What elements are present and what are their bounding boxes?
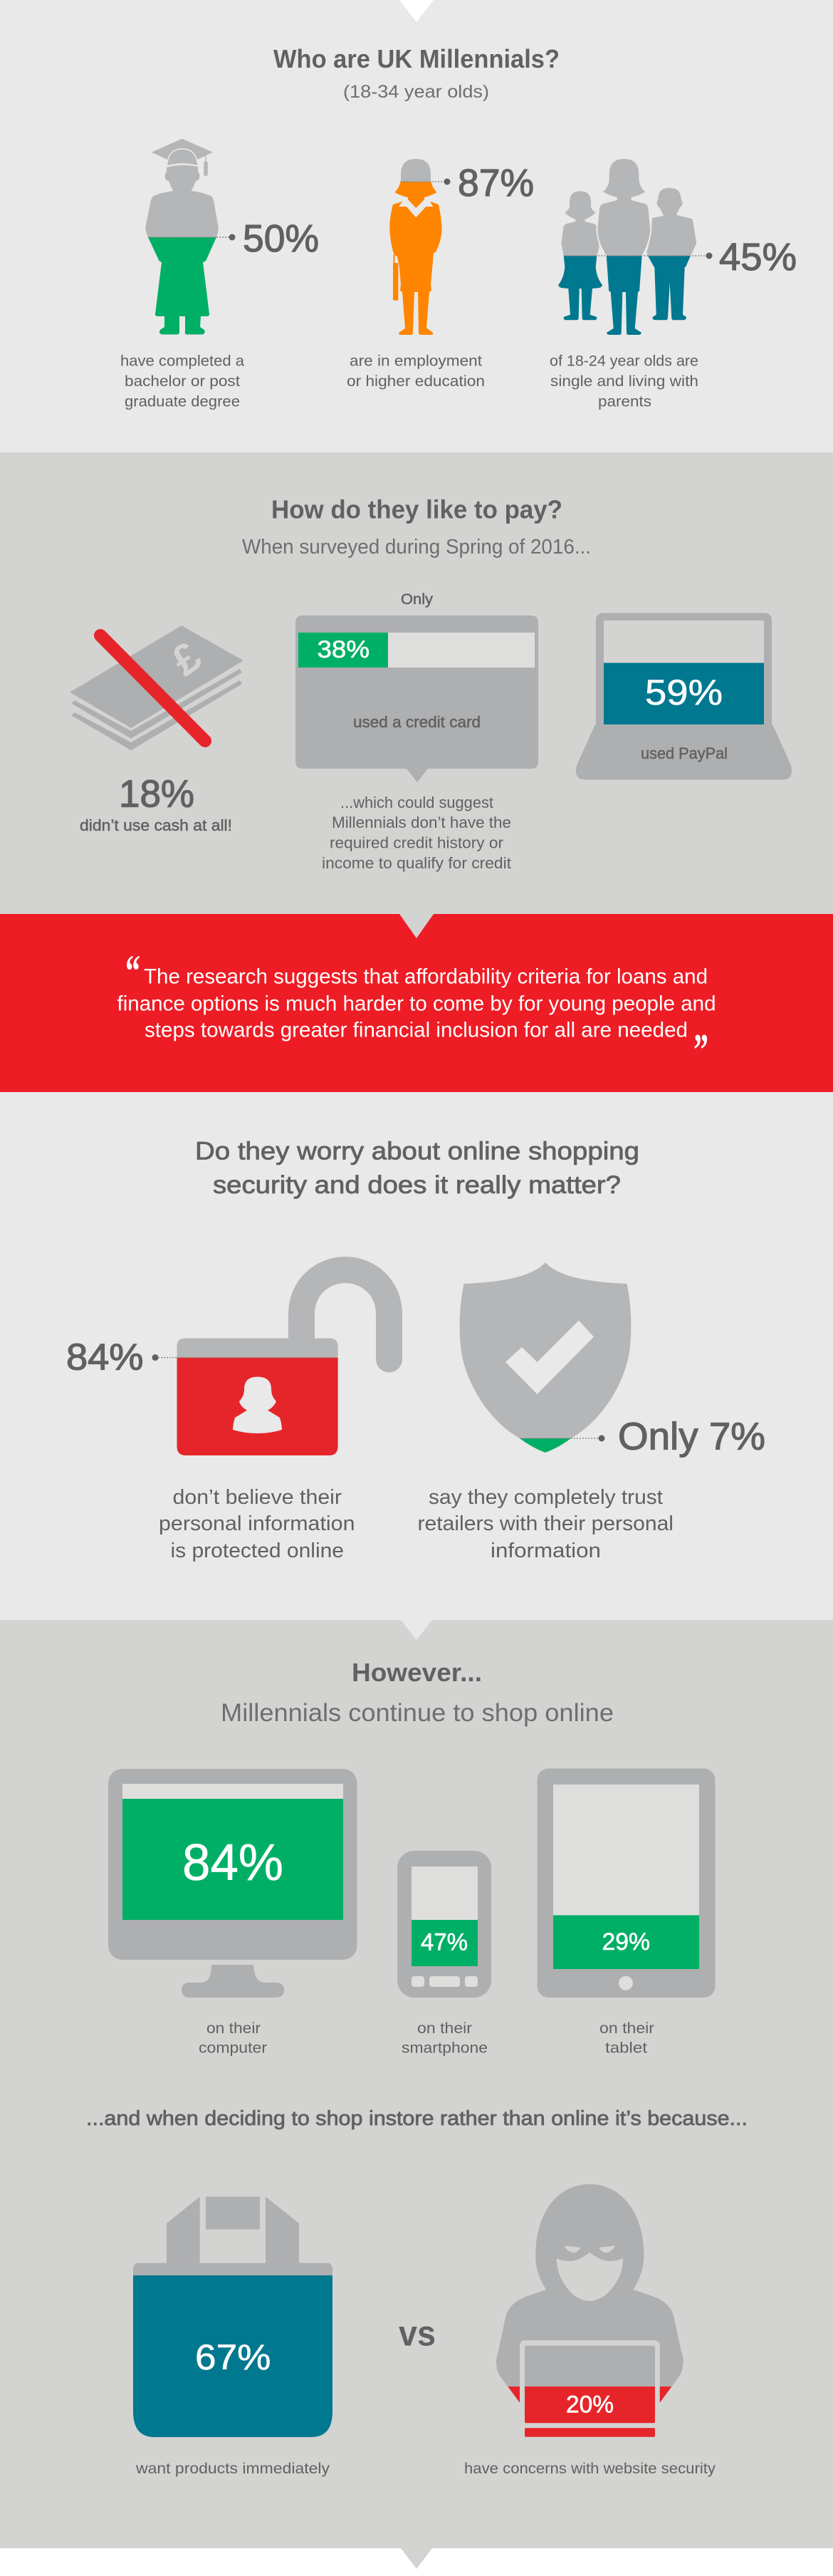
icon: shopping bag 67% [133, 2197, 332, 2437]
panel: how do they like to pay [0, 452, 833, 914]
caption: living with parents [550, 353, 698, 410]
caption: want products immediately: want products immediately [135, 2461, 330, 2477]
icon: credit card 38% [295, 616, 538, 782]
caption: degree: graduate degree [125, 393, 240, 410]
stat: 50%: 50% [243, 217, 319, 260]
caption: degree: have completed a [120, 353, 244, 369]
caption: degree [120, 353, 244, 410]
stat: only 7%: Only 7% [618, 1416, 765, 1458]
caption: employment: or higher education [347, 373, 485, 390]
subheading: (18-34 year olds) [343, 82, 489, 102]
icon: credit card 38%: used a credit card [353, 713, 481, 731]
icon: hacker at laptop 20% [496, 2184, 683, 2440]
icon: smartphone 47%: 47% [421, 1929, 468, 1956]
quote text: The research suggests that affordability criteria for loans and [144, 965, 708, 989]
caption: employment [347, 353, 485, 390]
caption: info not protected: don’t believe their [172, 1486, 342, 1509]
icon: laptop 59%: used PayPal [641, 744, 728, 762]
caption: tablet: on their [599, 2020, 654, 2037]
icon: credit card 38%: 38% [318, 636, 370, 663]
heading [195, 1137, 639, 1199]
caption: living with parents: single and living with [550, 373, 698, 390]
icon: tablet 29%: 29% [602, 1928, 650, 1956]
caption: trust retailers: retailers with their personal [417, 1512, 674, 1535]
quote text: steps towards greater financial inclusion for all are needed [145, 1019, 688, 1042]
caption: living with parents: parents [598, 393, 651, 410]
label: vs: vs [399, 2314, 436, 2354]
icon: shopping bag 67%: 67% [195, 2337, 271, 2377]
panel: red quote banner [0, 914, 833, 1092]
caption: credit history note: Millennials don’t have the [332, 814, 511, 831]
caption: info not protected: is protected online [171, 1539, 344, 1562]
caption: tablet [599, 2020, 654, 2057]
icon: employed woman 87% [389, 159, 450, 335]
caption: credit history note: income to qualify for credit [322, 854, 511, 872]
caption: computer [199, 2020, 267, 2057]
arrow: bottom pointer [401, 2548, 432, 2569]
caption: credit history note [322, 794, 511, 872]
caption: credit history note: required credit history or [330, 833, 503, 852]
stat: 84%: 84% [66, 1336, 144, 1378]
heading: Who are UK Millennials? [273, 44, 560, 73]
caption: computer: computer [199, 2040, 267, 2057]
caption: info not protected: personal information [159, 1512, 355, 1535]
icon: laptop 59%: 59% [645, 672, 723, 712]
caption: website security concerns: have concerns with website security [464, 2461, 716, 2477]
quote text: “ [125, 945, 140, 996]
quote text: ” [693, 1024, 708, 1075]
caption: smartphone [402, 2020, 488, 2057]
icon: tablet 29% [537, 1768, 715, 1998]
quote text [117, 945, 716, 1075]
icon: crossed-out banknotes: £ [163, 633, 210, 685]
stat: 87%: 87% [458, 162, 534, 204]
caption: smartphone: smartphone [402, 2040, 488, 2057]
heading: security and does it really matter? [213, 1171, 621, 1199]
icon: graduate 50% [145, 139, 235, 334]
caption: living with parents: of 18-24 year olds are [550, 353, 698, 369]
heading: How do they like to pay? [271, 494, 562, 524]
quote text: finance options is much harder to come by for young people and [117, 992, 716, 1015]
icon: crossed-out banknotes [71, 626, 242, 750]
subheading: When surveyed during Spring of 2016... [242, 536, 591, 559]
caption: trust retailers [417, 1486, 674, 1562]
heading: shop instore: ...and when deciding to shop instore rather than online it’s because... [86, 2107, 748, 2130]
caption: no cash: didn’t use cash at all! [80, 816, 232, 834]
heading: However... [352, 1658, 482, 1687]
icon: desktop computer 84% [108, 1769, 357, 1998]
heading: Do they worry about online shopping [195, 1137, 639, 1165]
caption: trust retailers: information [491, 1539, 601, 1562]
icon: laptop 59% [576, 613, 792, 779]
icon: desktop computer 84%: 84% [182, 1834, 283, 1891]
icon: hacker at laptop 20%: 20% [566, 2391, 614, 2419]
icon: smartphone 47% [397, 1851, 491, 1998]
stat: 18%: 18% [119, 772, 194, 815]
label: only: Only [401, 591, 434, 608]
caption: trust retailers: say they completely trust [429, 1486, 663, 1509]
subheading: Millennials continue to shop online [221, 1699, 614, 1727]
stat: 45%: 45% [719, 236, 797, 279]
panel: online shopping security [0, 1092, 833, 1620]
caption: credit history note: ...which could suggest [340, 794, 493, 811]
panel: who are UK millennials [0, 0, 833, 452]
caption: degree: bachelor or post [125, 373, 240, 390]
caption: info not protected [159, 1486, 355, 1562]
icon: open padlock 84% [152, 1269, 389, 1455]
caption: computer: on their [206, 2020, 261, 2037]
icon: family 45% [558, 159, 712, 335]
icon: shield 7% [460, 1262, 631, 1453]
caption: smartphone: on their [417, 2020, 472, 2037]
caption: tablet: tablet [605, 2040, 647, 2057]
panel: however millennials shop online [0, 1620, 833, 2548]
caption: employment: are in employment [350, 353, 482, 369]
